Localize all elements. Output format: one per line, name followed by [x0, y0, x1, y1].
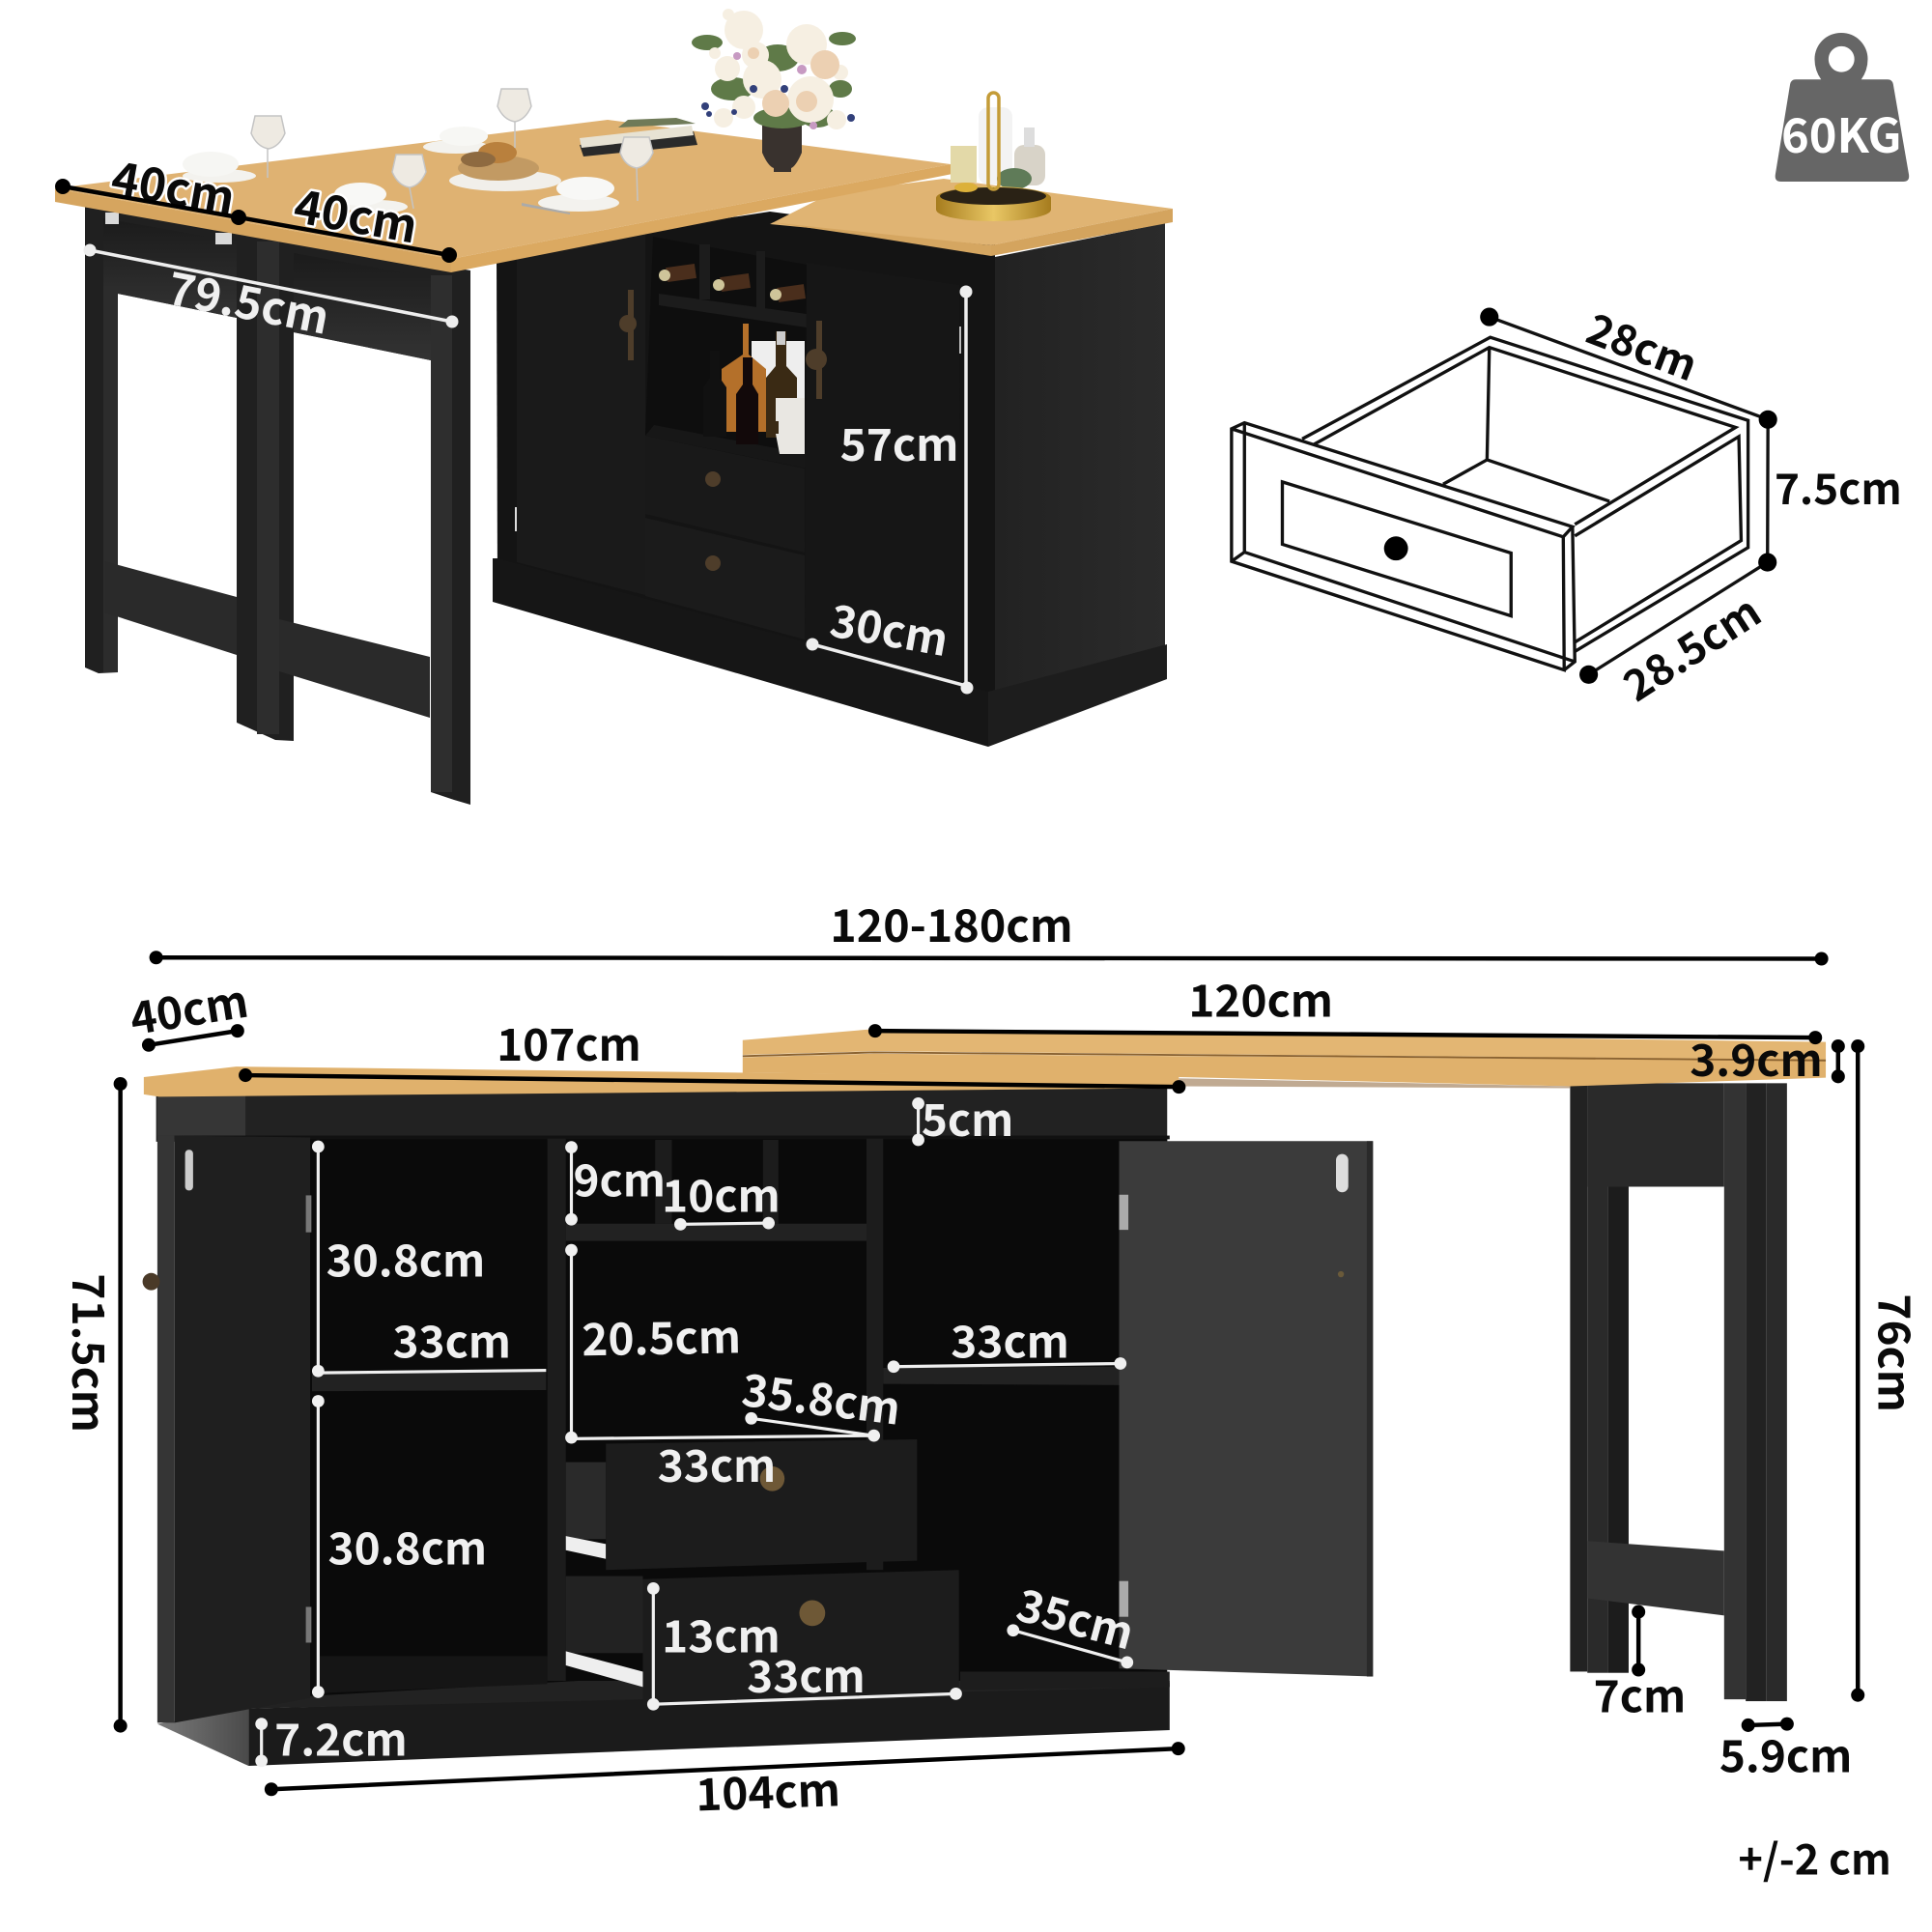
white dimension labels: 35cm [1010, 1571, 1142, 1662]
cabinet body [493, 212, 1167, 747]
right door [1119, 1141, 1373, 1677]
cabinet handles and drawer knobs [619, 290, 827, 571]
black dimension labels: 40cm [126, 967, 252, 1048]
white dimension labels [274, 1086, 1142, 1770]
dimension: 79.5cm width: 79.5cm [163, 251, 335, 348]
black dimension labels: 3.9cm [1690, 1026, 1823, 1090]
white dimension labels: 5cm [922, 1086, 1013, 1150]
white dimension labels: 33cm [658, 1432, 776, 1495]
dimension: 40cm depth, black [55, 140, 457, 263]
white dimension labels: 9cm [573, 1147, 666, 1210]
cabinet carcass [156, 1083, 1170, 1766]
flower vase [692, 9, 856, 172]
black dimension labels: 120cm [1188, 966, 1333, 1030]
white dimension labels: 33cm [392, 1308, 511, 1372]
white dimension labels: 20.5cm [582, 1302, 741, 1369]
right leg assembly [1570, 1083, 1787, 1701]
panel: bottom open cabinet front view [59, 891, 1928, 1887]
drawer dimension lines [1480, 308, 1777, 684]
dimension: 40cm depth, black: 40cm [290, 168, 423, 257]
black dimension labels: 107cm [497, 1010, 641, 1074]
drawer labels: 28cm [1579, 295, 1707, 393]
dimension: 40cm depth, black: 40cm [107, 140, 241, 229]
black dimension labels: 120-180cm [830, 891, 1073, 955]
white dimension labels: 30.8cm [327, 1226, 485, 1290]
black dimension labels: 5.9cm [1719, 1721, 1852, 1785]
drawer outline [1232, 337, 1748, 670]
white dimension labels: 10cm [662, 1162, 781, 1226]
panel: drawer line drawing [1232, 295, 1902, 713]
black dimension labels: 76cm [1864, 1293, 1928, 1412]
icon: 60KG weight: 60KG [1781, 99, 1902, 167]
open drawers [566, 1439, 959, 1706]
table legs and apron [85, 202, 470, 805]
table settings [183, 118, 697, 214]
wood tops [144, 1029, 1826, 1096]
black dimension labels: 71.5cm [59, 1273, 123, 1433]
wine glasses [251, 89, 653, 209]
dimension: 57cm height and 30cm width: 57cm [840, 411, 958, 474]
white dimension lines [255, 1097, 1133, 1767]
white dimension labels: 13cm [662, 1603, 781, 1666]
swing table top [55, 120, 952, 272]
black dimension labels [59, 891, 1928, 1887]
panel: top left table and cabinet photo [55, 9, 1173, 805]
fixed counter top [770, 179, 1173, 256]
drawer labels: 7.5cm [1775, 455, 1902, 517]
gold tray with bottles [936, 93, 1051, 221]
drawer labels [1579, 295, 1902, 713]
black dimension lines [114, 951, 1864, 1796]
icon: 60KG weight [1776, 33, 1909, 182]
dimension: 79.5cm width [83, 243, 458, 348]
wine rack and bottles [659, 264, 806, 454]
black dimension labels: 104cm [695, 1755, 841, 1824]
white dimension labels: 7.2cm [274, 1706, 408, 1770]
white dimension labels: 35.8cm [739, 1355, 904, 1438]
black dimension labels: 7cm [1594, 1662, 1686, 1725]
dimension: 57cm height and 30cm width [806, 286, 974, 694]
white dimension labels: 33cm [747, 1642, 866, 1706]
black dimension labels: +/-2 cm [1738, 1827, 1891, 1887]
white dimension labels: 33cm [951, 1308, 1069, 1372]
left door [143, 1136, 311, 1722]
white dimension labels: 30.8cm [328, 1514, 487, 1577]
drawer labels: 28.5cm [1609, 579, 1771, 713]
dimension: 57cm height and 30cm width: 30cm [826, 586, 953, 669]
